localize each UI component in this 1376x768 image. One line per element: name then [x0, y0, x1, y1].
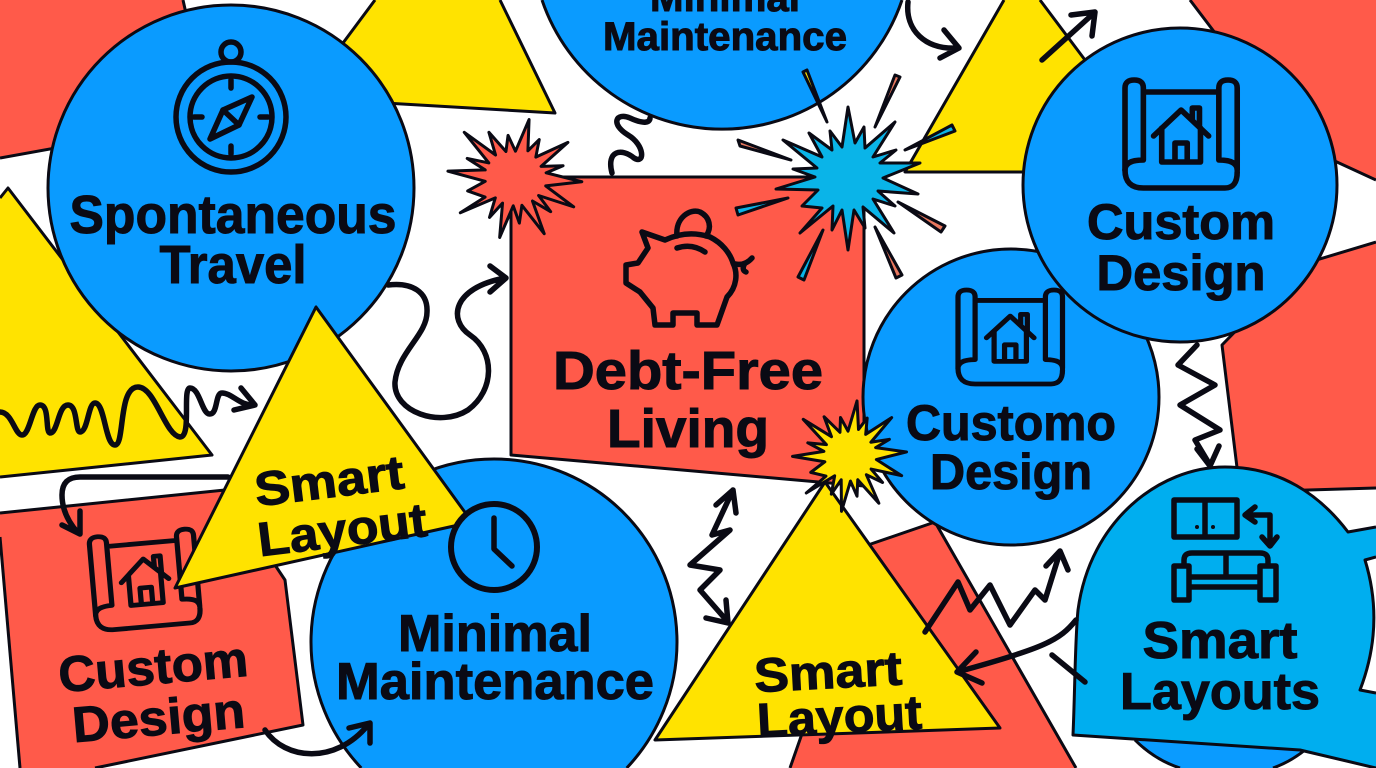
circle: minimal maintenance top [542, 0, 902, 129]
yellow triangle left [0, 188, 212, 477]
label: smart layout centre: Smart [753, 643, 903, 703]
zigzag arrow right [925, 551, 1068, 632]
label: smart layout: Layout [255, 494, 430, 567]
double zigzag arrow [690, 490, 736, 623]
icon: blueprint house bottom left [89, 528, 201, 631]
label: smart layout [249, 444, 430, 567]
circle: minimal maintenance [311, 459, 677, 768]
icon: blueprint house middle [958, 290, 1062, 384]
label: customo design: Customo [906, 395, 1116, 451]
heading: debt-free living [553, 341, 823, 459]
red square top right [1190, 0, 1376, 180]
label: minimal maintenance [336, 605, 654, 711]
burst: yellow [786, 393, 913, 519]
label: smart layout centre: Layout [756, 687, 923, 748]
label: custom design right [1087, 194, 1275, 301]
burst: red [435, 104, 593, 254]
icon: clock [451, 504, 537, 590]
burst: blue with rays [736, 70, 955, 280]
arrow into centre triangle [957, 620, 1085, 683]
triangle: smart layout centre [655, 482, 1000, 748]
red square top left [0, 0, 210, 158]
arrows top right [908, 2, 1095, 60]
zigzag arrow right down [1178, 345, 1220, 466]
circle: custom design right [1023, 28, 1337, 342]
label: custom design bottom left: Design [70, 682, 247, 753]
label: minimal maintenance: Maintenance [336, 653, 654, 711]
label: smart layout: Smart [252, 446, 407, 517]
label: customo design [906, 395, 1116, 500]
label: custom design right: Custom [1087, 194, 1275, 250]
label: minimal maintenance top: Maintenance [603, 15, 847, 59]
label: smart layouts: Layouts [1120, 663, 1320, 721]
yellow triangle top [343, 0, 555, 113]
circle: custom design middle [863, 249, 1159, 545]
panel: smart layouts [1073, 467, 1376, 768]
yellow triangle top right [905, 0, 1130, 172]
label: spontaneous travel: Spontaneous [70, 185, 396, 245]
label: smart layouts [1120, 612, 1320, 721]
icon: cabinet and sofa [1174, 500, 1277, 600]
icon: compass [176, 42, 286, 172]
curly arrow to debt-free [388, 266, 506, 418]
label: smart layout centre [753, 642, 923, 748]
label: custom design right: Design [1096, 245, 1266, 301]
label: smart layouts: Smart [1142, 612, 1298, 670]
label: custom design bottom left [56, 631, 255, 754]
label: custom design bottom left: Custom [56, 631, 250, 703]
heading: debt-free living: Living [607, 399, 769, 459]
circle under smart layouts [1135, 740, 1305, 768]
red square bottom centre [790, 522, 1076, 768]
label: spontaneous travel: Travel [160, 235, 306, 295]
heading: debt-free living: Debt-Free [553, 341, 823, 401]
circle: spontaneous travel [48, 5, 414, 371]
red square right [1222, 242, 1376, 492]
elbow arrow left [62, 477, 228, 534]
icon: blueprint house right [1125, 80, 1237, 188]
panel: debt-free living [511, 177, 864, 486]
label: customo design: Design [930, 444, 1092, 500]
curved arrow bottom [265, 723, 370, 754]
icon: piggy bank [626, 211, 752, 325]
squiggle top [611, 116, 650, 173]
wavy arrow left [0, 387, 255, 445]
triangle: smart layout [175, 307, 472, 588]
red square bottom left [0, 490, 303, 768]
label: spontaneous travel [70, 185, 396, 295]
label: minimal maintenance: Minimal [398, 605, 592, 663]
